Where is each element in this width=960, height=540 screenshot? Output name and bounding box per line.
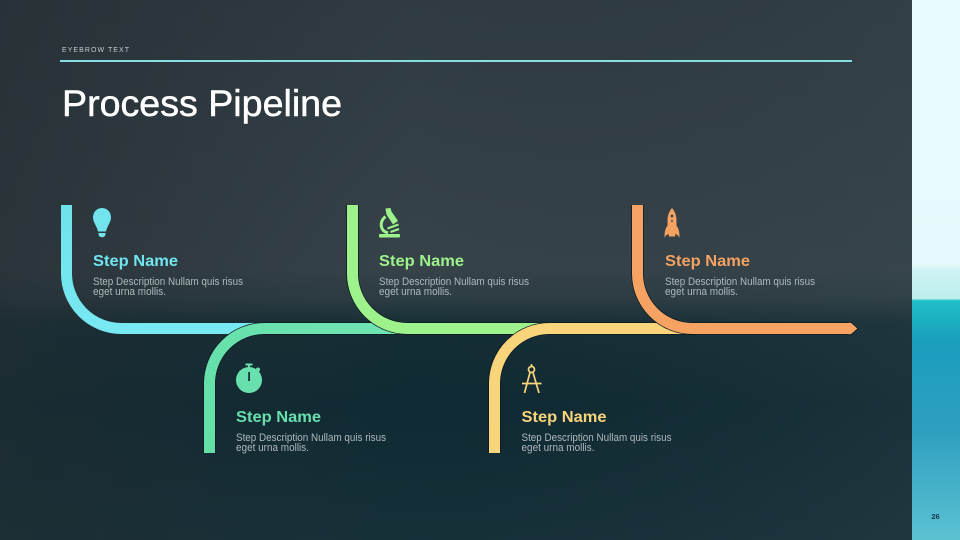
- pipe: step 3 light green: [352, 205, 551, 328]
- step name: Step Name: [522, 409, 607, 426]
- step description: eget urna mollis.: [236, 442, 309, 454]
- title: Process Pipeline: [62, 83, 342, 124]
- step name: Step Name: [665, 253, 750, 270]
- pipeline: [66, 205, 858, 453]
- pipe: step 4 yellow: [494, 328, 693, 453]
- step description: eget urna mollis.: [522, 442, 594, 454]
- page number: 26: [931, 512, 940, 521]
- step description: eget urna mollis.: [93, 286, 166, 298]
- header rule: [60, 60, 852, 62]
- pipe: step 2 green: [209, 328, 408, 453]
- icon: drafting compass: [522, 364, 542, 393]
- icon: light bulb: [93, 208, 111, 237]
- step name: Step Name: [236, 409, 321, 426]
- step description: eget urna mollis.: [379, 286, 452, 298]
- pipe: step 1 blue: [66, 205, 265, 328]
- pipe: step 5 orange with arrow tip: [637, 205, 858, 335]
- step description: Step Description Nullam quis risus: [236, 432, 387, 444]
- icon: rocket: [664, 208, 680, 238]
- eyebrow text: EYEBROW TEXT: [62, 47, 130, 54]
- step name: Step Name: [93, 253, 178, 270]
- step 4: [522, 364, 672, 454]
- step 2: [236, 364, 387, 454]
- icon: microscope: [379, 208, 400, 238]
- side panel: [912, 0, 960, 540]
- step description: Step Description Nullam quis risus: [379, 276, 530, 288]
- step 5: [664, 208, 816, 298]
- step description: eget urna mollis.: [665, 286, 738, 298]
- icon: stopwatch: [236, 364, 262, 393]
- step 1: [93, 208, 244, 298]
- step description: Step Description Nullam quis risus: [93, 276, 244, 288]
- step name: Step Name: [379, 253, 464, 270]
- step description: Step Description Nullam quis risus: [522, 432, 672, 444]
- step 3: [379, 208, 530, 298]
- step description: Step Description Nullam quis risus: [665, 276, 816, 288]
